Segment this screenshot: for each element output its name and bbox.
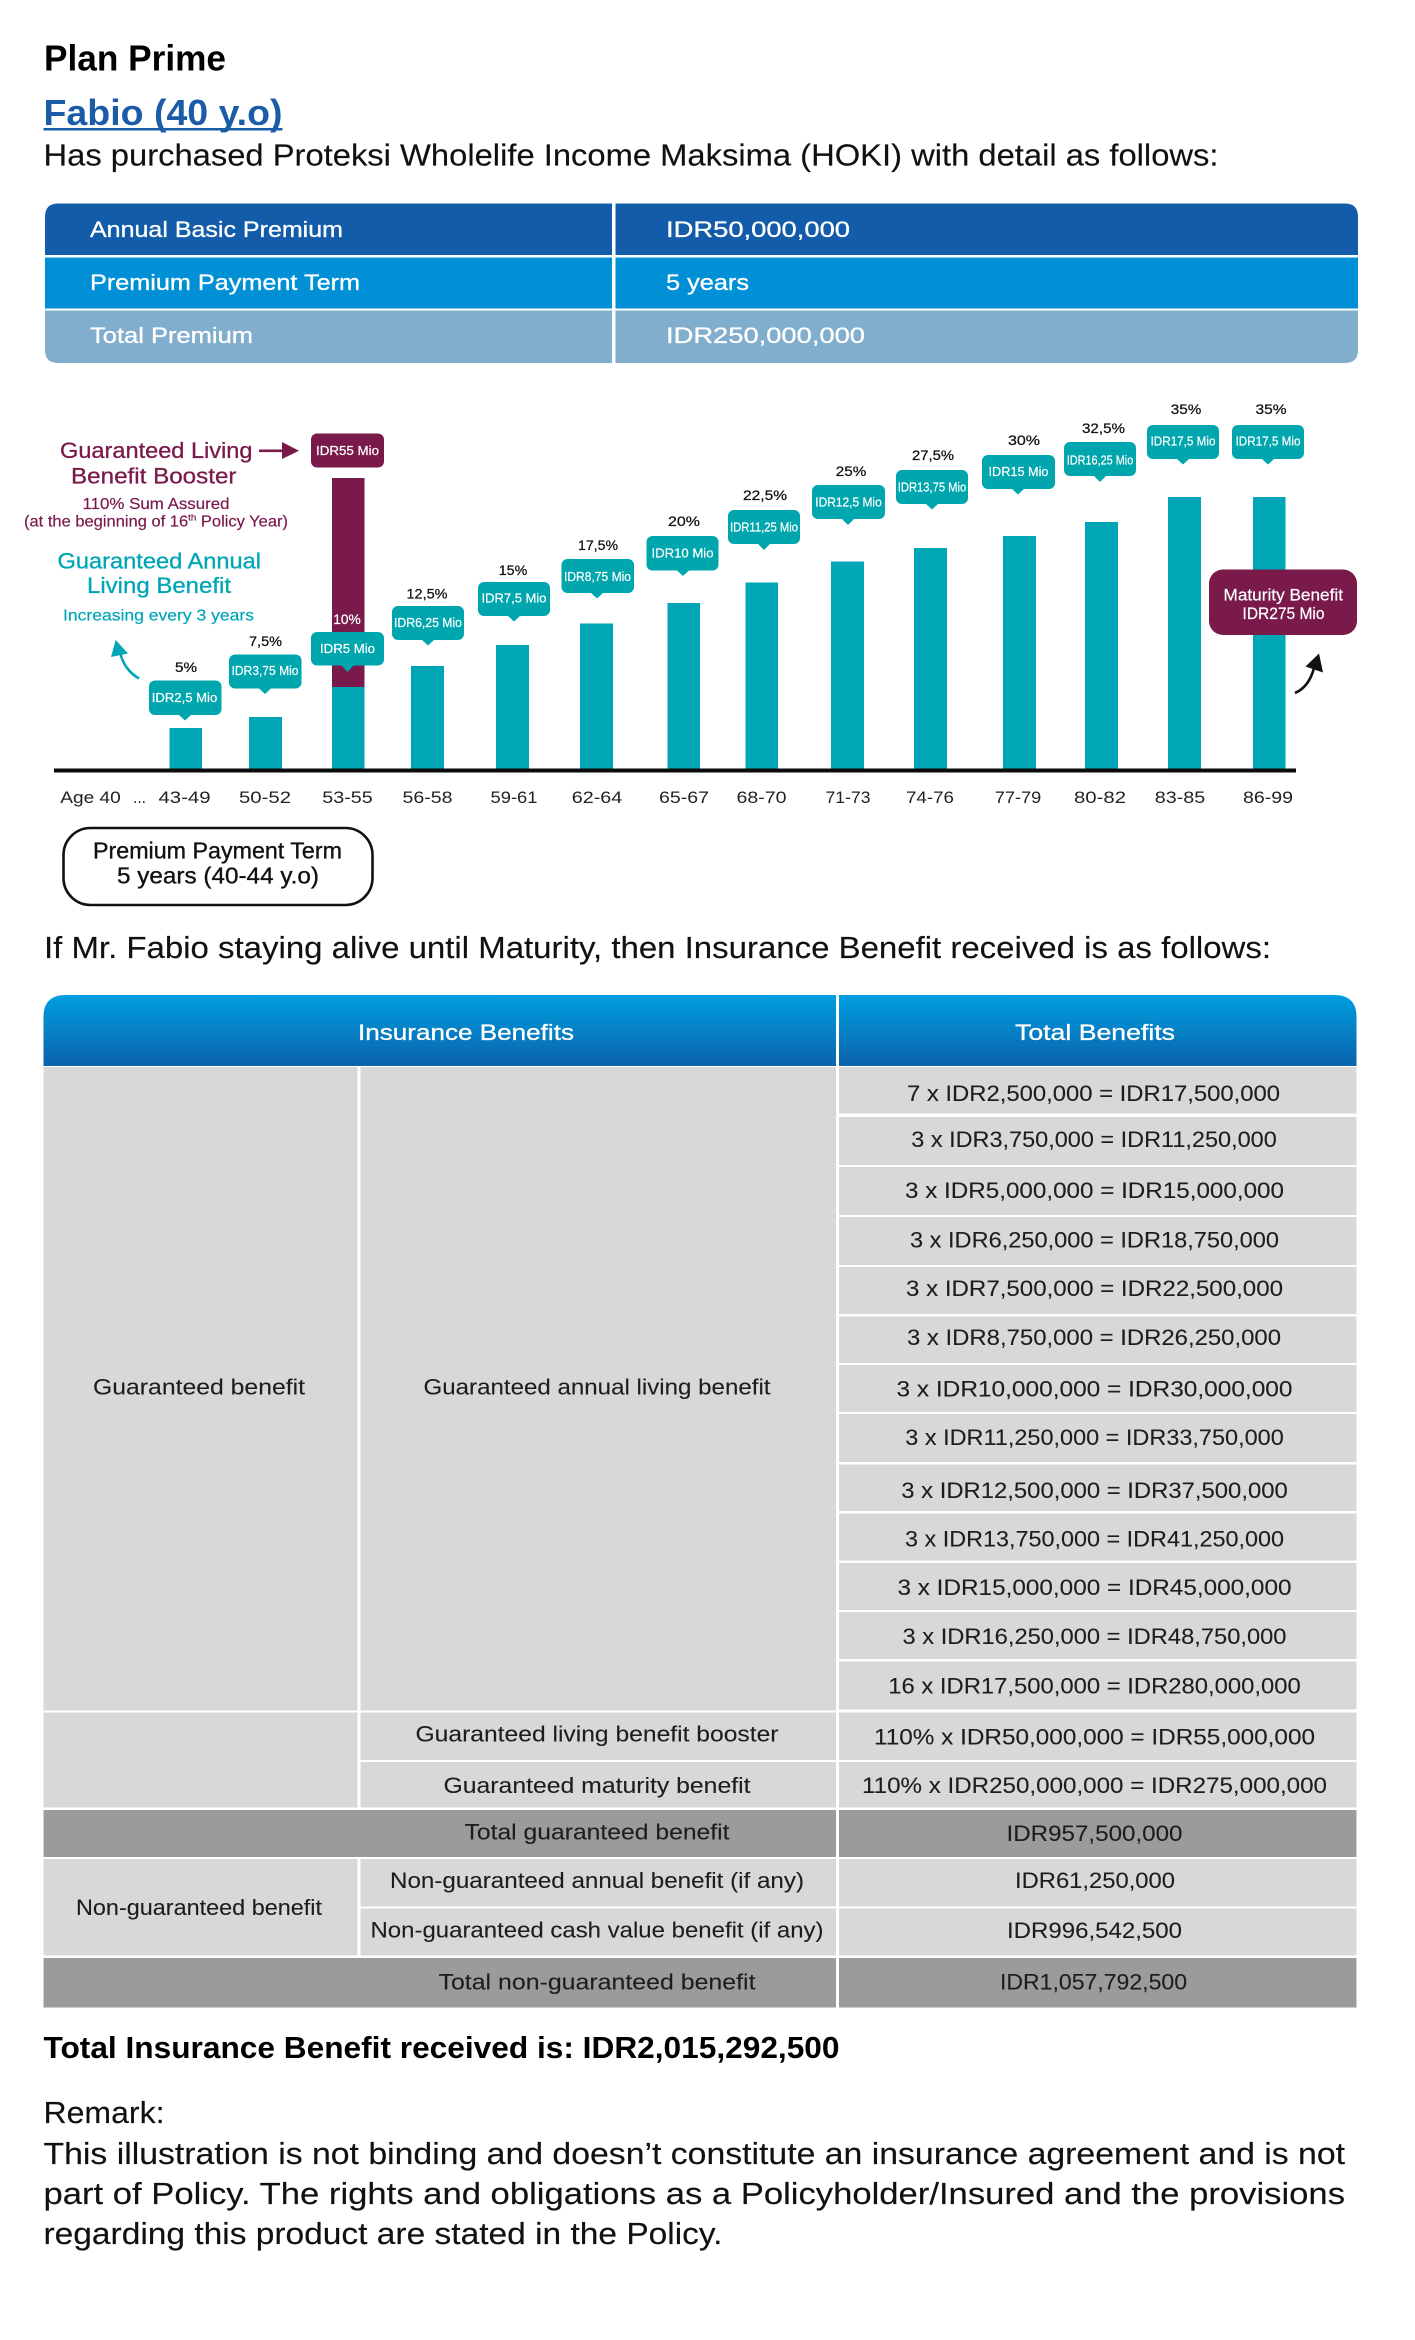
total benefits rows: 3 x IDR12,500,000 = IDR37,500,000 bbox=[901, 1478, 1288, 1503]
axis line bbox=[54, 768, 1296, 772]
total benefits rows: 3 x IDR10,000,000 = IDR30,000,000 bbox=[896, 1376, 1292, 1402]
row: total guaranteed benefit: Total guaranteed benefit bbox=[464, 1820, 730, 1844]
cell: non-guaranteed benefit: Non-guaranteed benefit bbox=[76, 1895, 322, 1920]
cell: non-guaranteed benefit bbox=[44, 1859, 358, 1956]
callout: booster IDR55 Mio: IDR55 Mio bbox=[316, 444, 379, 458]
row: guaranteed maturity benefit: 110% x IDR250,000,000 = IDR275,000,000 bbox=[862, 1773, 1327, 1798]
row: total premium: IDR250,000,000 bbox=[666, 323, 865, 348]
callout: 25% IDR12,5 Mio: IDR12,5 Mio bbox=[815, 496, 882, 510]
cell: blank guaranteed bbox=[44, 1712, 358, 1808]
row: annual basic premium: IDR50,000,000 bbox=[666, 217, 850, 242]
label: guaranteed living benefit booster: Policy Year) bbox=[196, 514, 288, 530]
table header bbox=[44, 995, 1356, 1066]
label: guaranteed living benefit booster: Guaranteed Living bbox=[60, 438, 252, 463]
callout: maturity benefit bbox=[1209, 570, 1357, 635]
axis labels: 71-73 bbox=[826, 788, 870, 807]
axis labels: 83-85 bbox=[1155, 788, 1205, 807]
panel: insurance benefits table bbox=[44, 995, 1356, 2008]
callout: 17,5% IDR8,75 Mio: IDR8,75 Mio bbox=[564, 570, 631, 584]
axis labels: 86-99 bbox=[1243, 788, 1293, 807]
row: premium payment term: 5 years bbox=[666, 270, 749, 295]
label: guaranteed living benefit booster bbox=[24, 438, 288, 530]
arrow: black curved up-right bbox=[1295, 654, 1323, 693]
row: guaranteed maturity benefit: Guaranteed maturity benefit bbox=[444, 1773, 750, 1798]
callout: maturity benefit: IDR275 Mio bbox=[1242, 604, 1324, 623]
callout: 30% IDR15 Mio bbox=[982, 432, 1055, 494]
axis labels: 59-61 bbox=[490, 788, 538, 807]
row: guaranteed living benefit booster bbox=[360, 1712, 1356, 1760]
total insurance benefit: Total Insurance Benefit received is: IDR2,015,292,500 bbox=[44, 2031, 840, 2065]
total benefits rows: 3 x IDR6,250,000 = IDR18,750,000 bbox=[910, 1228, 1279, 1252]
axis labels: 65-67 bbox=[659, 788, 709, 807]
callout: 35% IDR17,5 Mio final: IDR17,5 Mio bbox=[1236, 434, 1301, 448]
row: annual basic premium bbox=[45, 204, 1358, 255]
bar chart: benefit schedule bbox=[24, 401, 1357, 905]
callout: 27,5% IDR13,75 Mio bbox=[896, 447, 968, 510]
row: total non-guaranteed benefit: Total non-guaranteed benefit bbox=[438, 1970, 756, 1994]
heading: customer name: Fabio (40 y.o) bbox=[44, 92, 282, 133]
axis labels: ... bbox=[133, 788, 146, 807]
total benefits rows: 3 x IDR15,000,000 = IDR45,000,000 bbox=[898, 1575, 1292, 1600]
row: total non-guaranteed benefit bbox=[44, 1958, 1356, 2008]
callout: 25% IDR12,5 Mio: 25% bbox=[836, 463, 866, 479]
callout: 20% IDR10 Mio bbox=[646, 513, 718, 576]
callout: 15% IDR7,5 Mio: IDR7,5 Mio bbox=[482, 592, 547, 606]
label: premium payment term pill: 5 years (40-44 y.o) bbox=[117, 862, 319, 888]
callout: 12,5% IDR6,25 Mio: IDR6,25 Mio bbox=[394, 616, 462, 630]
callout: 35% IDR17,5 Mio: 35% bbox=[1171, 401, 1201, 417]
total benefits rows: 16 x IDR17,500,000 = IDR280,000,000 bbox=[888, 1674, 1301, 1698]
row: guaranteed maturity benefit bbox=[360, 1762, 1356, 1808]
callout: 30% IDR15 Mio: IDR15 Mio bbox=[988, 465, 1049, 479]
axis labels: 77-79 bbox=[995, 788, 1041, 807]
callout: 22,5% IDR11,25 Mio bbox=[728, 487, 800, 550]
axis labels: 80-82 bbox=[1074, 788, 1126, 807]
callout: maturity benefit: Maturity Benefit bbox=[1224, 586, 1343, 604]
row: guaranteed living benefit booster: Guaranteed living benefit booster bbox=[416, 1722, 778, 1746]
axis labels: Age 40 bbox=[60, 788, 121, 807]
axis labels bbox=[60, 788, 1293, 807]
row: non-guaranteed annual benefit bbox=[360, 1859, 1356, 1906]
callout: 32,5% IDR16,25 Mio bbox=[1064, 420, 1136, 482]
cell: guaranteed annual living benefit: Guaranteed annual living benefit bbox=[424, 1374, 770, 1400]
total benefits rows: 3 x IDR11,250,000 = IDR33,750,000 bbox=[905, 1425, 1284, 1450]
remark text block: part of Policy. The rights and obligations as a Policyholder/Insured and the provisions bbox=[44, 2177, 1345, 2211]
row: guaranteed living benefit booster: 110% x IDR50,000,000 = IDR55,000,000 bbox=[874, 1724, 1315, 1750]
callout: 17,5% IDR8,75 Mio: 17,5% bbox=[578, 537, 618, 553]
remark text block bbox=[44, 2096, 1346, 2251]
callout: 35% IDR17,5 Mio: IDR17,5 Mio bbox=[1150, 434, 1216, 448]
callout: 5% IDR2,5 Mio bbox=[149, 659, 222, 720]
row: total premium: Total Premium bbox=[90, 323, 253, 348]
label: guaranteed living benefit booster: (at the beginning of 16 bbox=[24, 514, 183, 530]
panel: premium summary table bbox=[45, 204, 1358, 363]
callout: 20% IDR10 Mio: IDR10 Mio bbox=[652, 546, 714, 560]
remark text block: Remark: bbox=[44, 2096, 164, 2130]
callout: 7,5% IDR3,75 Mio: 7,5% bbox=[249, 633, 282, 649]
callout: 7,5% IDR3,75 Mio: IDR3,75 Mio bbox=[232, 664, 299, 678]
axis labels: 68-70 bbox=[736, 788, 786, 807]
row: total premium bbox=[45, 310, 1358, 363]
bars bbox=[170, 478, 1286, 770]
callout: 10% IDR5 Mio bbox=[311, 611, 384, 672]
label: premium payment term pill bbox=[64, 828, 372, 905]
axis labels: 74-76 bbox=[906, 788, 954, 807]
callout: 25% IDR12,5 Mio bbox=[812, 463, 885, 525]
callout: 15% IDR7,5 Mio: 15% bbox=[499, 562, 527, 578]
row: annual basic premium: Annual Basic Premium bbox=[90, 217, 343, 242]
callout: 15% IDR7,5 Mio bbox=[478, 562, 550, 622]
cell: guaranteed benefit: Guaranteed benefit bbox=[93, 1374, 305, 1400]
callout: 20% IDR10 Mio: 20% bbox=[668, 513, 700, 529]
callout: 12,5% IDR6,25 Mio: 12,5% bbox=[406, 586, 448, 602]
row: non-guaranteed annual benefit: IDR61,250,000 bbox=[1015, 1868, 1175, 1893]
callout: 35% IDR17,5 Mio bbox=[1147, 401, 1219, 464]
label: guaranteed living benefit booster: 110% Sum Assured bbox=[82, 496, 230, 513]
callout: 35% IDR17,5 Mio final bbox=[1232, 401, 1304, 464]
callout: 35% IDR17,5 Mio final: 35% bbox=[1256, 401, 1286, 417]
callout: 27,5% IDR13,75 Mio: 27,5% bbox=[912, 447, 954, 463]
total benefits rows: 3 x IDR16,250,000 = IDR48,750,000 bbox=[902, 1624, 1286, 1649]
row: premium payment term: Premium Payment Term bbox=[90, 270, 360, 295]
callout: booster IDR55 Mio bbox=[311, 434, 384, 468]
total benefits rows: 3 x IDR5,000,000 = IDR15,000,000 bbox=[905, 1178, 1284, 1203]
title: Plan Prime bbox=[44, 38, 226, 78]
callout: 22,5% IDR11,25 Mio: 22,5% bbox=[743, 487, 787, 503]
callout: 5% IDR2,5 Mio: 5% bbox=[175, 659, 197, 675]
axis labels: 43-49 bbox=[158, 788, 210, 807]
row: premium payment term bbox=[45, 258, 1358, 308]
row: non-guaranteed annual benefit: Non-guaranteed annual benefit (if any) bbox=[390, 1868, 804, 1893]
callout: 12,5% IDR6,25 Mio bbox=[392, 586, 464, 646]
label: guaranteed annual living benefit: Guaranteed Annual bbox=[58, 548, 261, 574]
label: guaranteed living benefit booster: Benefit Booster bbox=[71, 464, 236, 488]
callout: 10% IDR5 Mio: IDR5 Mio bbox=[320, 642, 375, 656]
row: total non-guaranteed benefit: IDR1,057,792,500 bbox=[1000, 1970, 1187, 1994]
label: guaranteed annual living benefit: Increasing every 3 years bbox=[63, 608, 254, 624]
axis labels: 62-64 bbox=[572, 788, 622, 807]
arrow: teal curved up-left bbox=[111, 640, 139, 678]
callout: 27,5% IDR13,75 Mio: IDR13,75 Mio bbox=[898, 480, 966, 494]
cell: guaranteed annual living benefit bbox=[360, 1067, 836, 1710]
remark text block: regarding this product are stated in the Policy. bbox=[44, 2217, 722, 2251]
axis labels: 50-52 bbox=[239, 788, 291, 807]
axis labels: 56-58 bbox=[402, 788, 452, 807]
total benefits rows: 3 x IDR8,750,000 = IDR26,250,000 bbox=[907, 1325, 1281, 1350]
row: non-guaranteed cash value benefit: Non-guaranteed cash value benefit (if any) bbox=[370, 1918, 824, 1942]
total benefits rows: 7 x IDR2,500,000 = IDR17,500,000 bbox=[907, 1081, 1280, 1106]
row: total guaranteed benefit bbox=[44, 1810, 1356, 1857]
callout: 17,5% IDR8,75 Mio bbox=[562, 537, 634, 598]
row: total guaranteed benefit: IDR957,500,000 bbox=[1006, 1821, 1182, 1846]
total benefits rows bbox=[839, 1067, 1356, 1710]
callout: 7,5% IDR3,75 Mio bbox=[229, 633, 302, 694]
intro text: Has purchased Proteksi Wholelife Income Maksima (HOKI) with detail as follows: bbox=[44, 138, 1218, 172]
total benefits rows: 3 x IDR7,500,000 = IDR22,500,000 bbox=[906, 1276, 1283, 1301]
table header: Insurance Benefits bbox=[358, 1020, 574, 1045]
total benefits rows: 3 x IDR3,750,000 = IDR11,250,000 bbox=[911, 1127, 1277, 1152]
callout: 32,5% IDR16,25 Mio: IDR16,25 Mio bbox=[1067, 454, 1133, 468]
row: non-guaranteed cash value benefit: IDR996,542,500 bbox=[1007, 1918, 1182, 1943]
callout: 32,5% IDR16,25 Mio: 32,5% bbox=[1082, 420, 1125, 436]
remark text block: This illustration is not binding and doesn’t constitute an insurance agreement and is not bbox=[44, 2137, 1346, 2171]
callout: 5% IDR2,5 Mio: IDR2,5 Mio bbox=[152, 691, 217, 705]
callout: 30% IDR15 Mio: 30% bbox=[1008, 432, 1040, 448]
label: guaranteed living benefit booster: th bbox=[188, 512, 196, 524]
label: guaranteed annual living benefit: Living Benefit bbox=[87, 573, 231, 598]
total benefits rows: 3 x IDR13,750,000 = IDR41,250,000 bbox=[905, 1526, 1284, 1552]
callout: 22,5% IDR11,25 Mio: IDR11,25 Mio bbox=[730, 520, 798, 534]
table header: Total Benefits bbox=[1015, 1020, 1175, 1045]
row: non-guaranteed cash value benefit bbox=[360, 1908, 1356, 1956]
label: premium payment term pill: Premium Payment Term bbox=[93, 838, 342, 864]
arrow: booster pointer bbox=[259, 442, 299, 459]
cell: guaranteed benefit bbox=[44, 1067, 358, 1710]
text: maturity intro: If Mr. Fabio staying alive until Maturity, then Insurance Benefit received is as follows: bbox=[44, 931, 1271, 965]
label: guaranteed annual living benefit bbox=[58, 548, 261, 624]
callout: 10% IDR5 Mio: 10% bbox=[333, 611, 361, 627]
axis labels: 53-55 bbox=[322, 788, 373, 807]
